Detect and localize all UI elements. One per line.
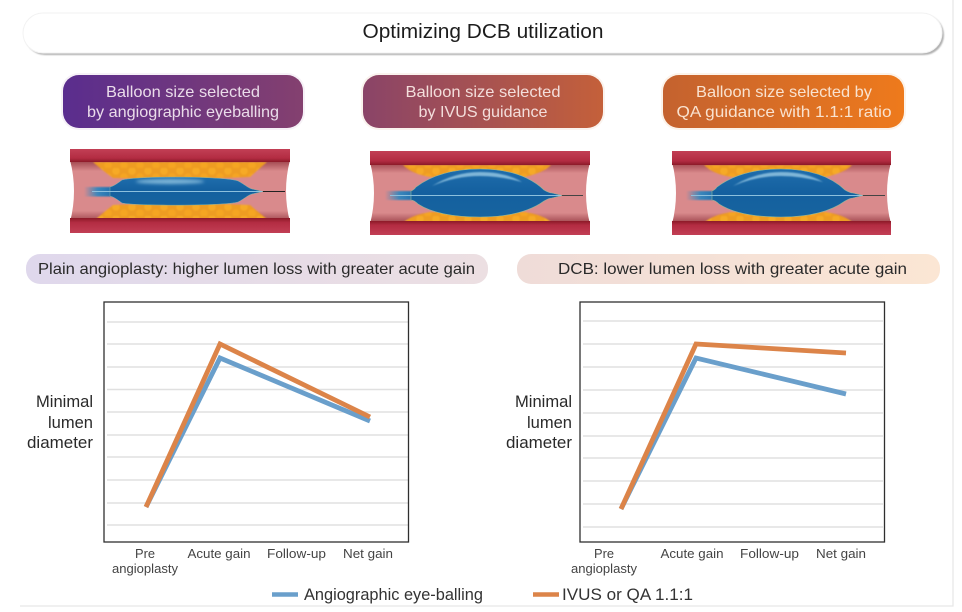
icon: vessel with QA-sized balloon xyxy=(672,151,891,235)
legend: Angiographic eye-balling xyxy=(304,585,483,604)
panel: QA guidance button: Balloon size selected by xyxy=(696,84,872,101)
line chart: plain angioplasty: lumen xyxy=(48,414,93,432)
line chart: DCB: diameter xyxy=(506,434,573,452)
line chart: plain angioplasty: Pre xyxy=(135,546,155,561)
line chart: plain angioplasty xyxy=(27,302,408,576)
line chart: DCB: Acute gain xyxy=(660,546,724,561)
panel: QA guidance button: QA guidance with 1.1:1 ratio xyxy=(676,104,892,121)
line chart: DCB: Minimal xyxy=(515,393,572,411)
panel: angiographic eyeballing button: by angiographic eyeballing xyxy=(87,104,279,121)
line chart: DCB: Follow-up xyxy=(740,546,799,561)
line chart: plain angioplasty: Net gain xyxy=(343,546,393,561)
panel: IVUS guidance button: Balloon size selected xyxy=(406,84,560,101)
line chart: DCB: lumen xyxy=(527,414,572,432)
panel: IVUS guidance button: by IVUS guidance xyxy=(418,104,548,121)
line chart: plain angioplasty: angioplasty xyxy=(112,561,178,576)
heading: DCB: DCB: lower lumen loss with greater acute gain xyxy=(558,261,907,278)
heading: plain angioplasty: Plain angioplasty: higher lumen loss with greater acute gain xyxy=(38,261,475,278)
line chart: plain angioplasty: Acute gain xyxy=(188,546,250,561)
line chart: DCB xyxy=(506,302,884,576)
line chart: plain angioplasty: Follow-up xyxy=(267,546,326,561)
icon: vessel with IVUS-sized balloon xyxy=(370,151,590,235)
icon: vessel with undersized balloon xyxy=(70,149,290,233)
panel: QA guidance button xyxy=(661,73,906,130)
line chart: DCB: angioplasty xyxy=(571,561,637,576)
legend xyxy=(272,585,693,604)
heading: DCB xyxy=(517,254,940,284)
line chart: DCB: Net gain xyxy=(816,546,866,561)
panel: IVUS guidance button xyxy=(361,73,605,130)
panel: angiographic eyeballing button xyxy=(61,73,305,130)
title: Optimizing DCB utilization xyxy=(362,21,604,43)
title xyxy=(23,13,944,55)
line chart: DCB: Pre xyxy=(594,546,614,561)
heading: plain angioplasty xyxy=(26,254,488,284)
legend: IVUS or QA 1.1:1 xyxy=(562,585,693,604)
panel: angiographic eyeballing button: Balloon size selected xyxy=(106,84,260,101)
line chart: plain angioplasty: Minimal xyxy=(36,393,93,411)
line chart: plain angioplasty: diameter xyxy=(27,434,94,452)
